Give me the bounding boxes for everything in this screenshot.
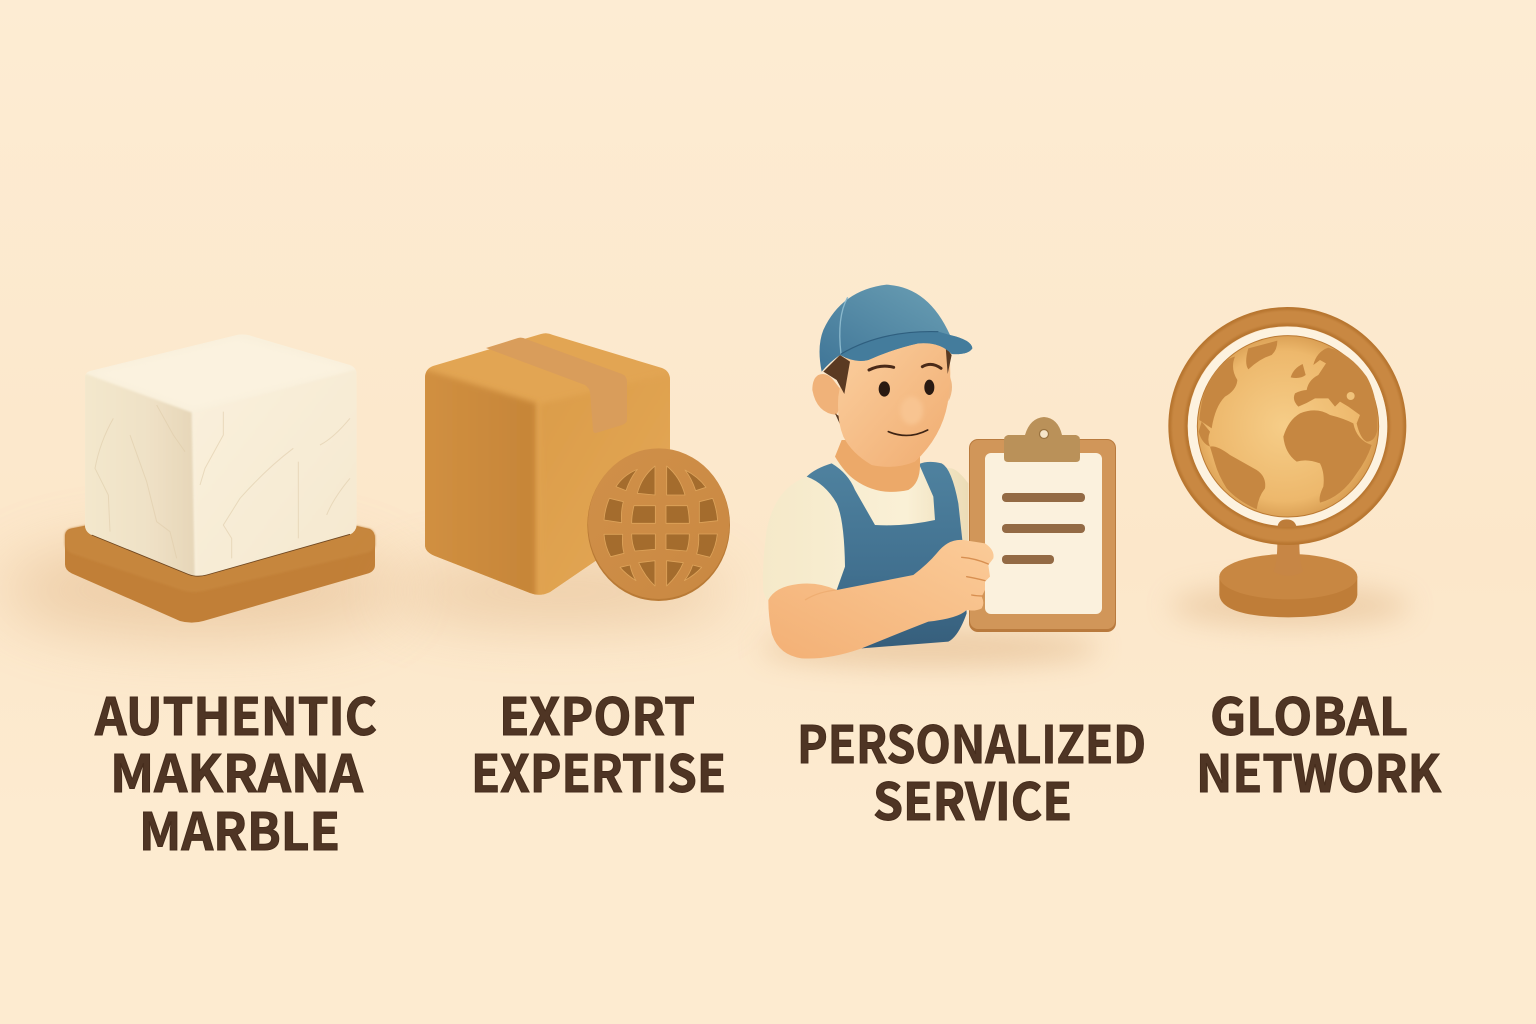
label: export expertise: EXPERTISE: [471, 733, 726, 807]
worker arm and hand: [768, 540, 994, 659]
label: authentic makrana marble: [94, 676, 377, 865]
globe ring: [1178, 317, 1397, 535]
label: global network: NETWORK: [1196, 733, 1442, 807]
label: personalized service: PERSONALIZED: [797, 704, 1146, 778]
globe ring inner light gap: [1188, 327, 1387, 526]
icon: cardboard box with globe badge: [390, 328, 730, 622]
box body: [420, 328, 675, 600]
clipboard lines: [1002, 493, 1085, 564]
globe sphere: [1197, 336, 1379, 517]
label: personalized service: [797, 704, 1146, 835]
worker mouth: [888, 430, 928, 435]
worker neck: [835, 440, 920, 492]
worker eyes: [879, 380, 934, 397]
worker nose: [900, 397, 923, 425]
icon: desktop globe: [1170, 317, 1410, 626]
label: global network: [1196, 676, 1442, 807]
inland sea: [1347, 392, 1355, 400]
marble block: [80, 332, 363, 585]
worker face: [838, 338, 950, 467]
label: authentic makrana marble: MAKRANA: [110, 733, 363, 807]
packing tape: [486, 338, 627, 433]
worker hair: [823, 347, 952, 394]
icon: marble block on base: [0, 332, 400, 640]
worker ear: [812, 374, 845, 415]
worker eyebrows: [869, 364, 941, 370]
label: authentic makrana marble: AUTHENTIC: [94, 676, 377, 750]
globe pivot: [1277, 519, 1297, 527]
clipboard clip: [1004, 417, 1080, 462]
worker overalls: [807, 462, 967, 648]
marble base plinth: [65, 524, 375, 623]
label: personalized service: SERVICE: [873, 761, 1072, 835]
label: authentic makrana marble: MARBLE: [139, 791, 340, 865]
globe badge: [587, 448, 730, 601]
worker cap: [820, 285, 972, 372]
globe stand base: [1219, 542, 1357, 617]
clipboard: [969, 417, 1116, 632]
continents: [1199, 341, 1377, 509]
worker head: [812, 285, 972, 467]
label: export expertise: [471, 676, 726, 807]
worker shirt: [763, 462, 968, 600]
icon: worker holding clipboard: [760, 285, 1116, 666]
worker body: [763, 440, 968, 648]
label: global network: GLOBAL: [1210, 676, 1408, 750]
label: export expertise: EXPORT: [499, 676, 695, 750]
